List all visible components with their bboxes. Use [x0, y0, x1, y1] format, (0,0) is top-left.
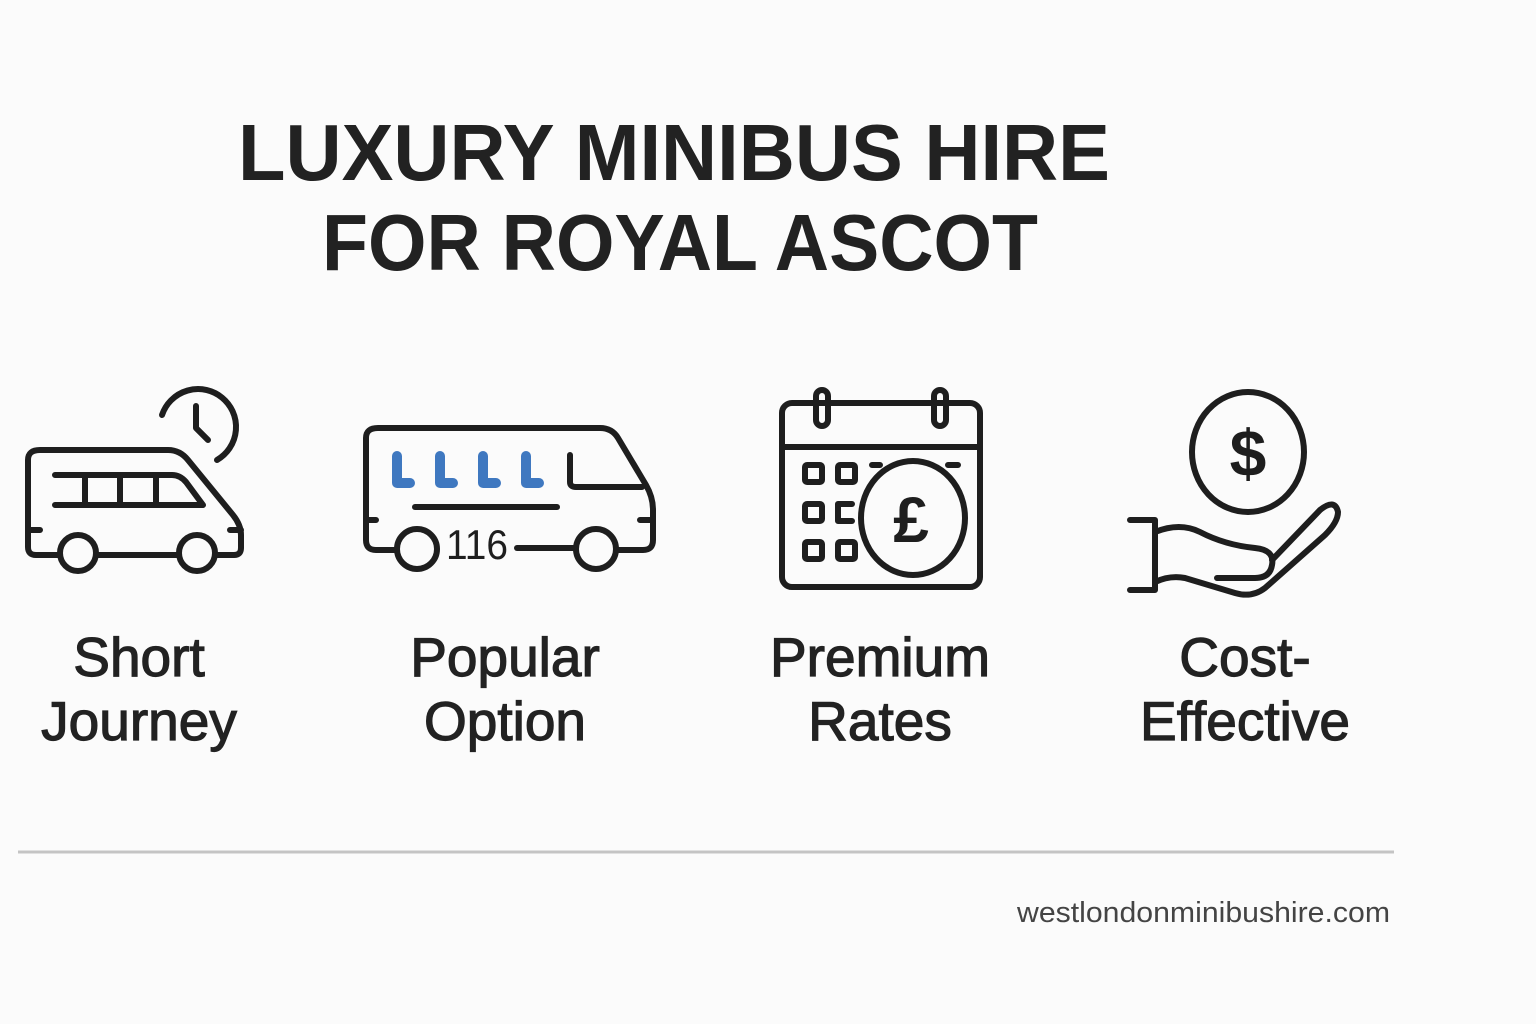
- label: cost-effective: Effective: [1140, 690, 1350, 752]
- title: LUXURY MINIBUS HIRE: [238, 108, 1110, 197]
- label: short journey: Short: [73, 626, 205, 688]
- icon: calendar with pound coin: [782, 390, 980, 587]
- label: premium rates: Rates: [808, 690, 952, 752]
- label: popular option: Popular: [410, 626, 600, 688]
- labels: [41, 626, 1350, 752]
- icon: minibus with seats: [366, 428, 653, 569]
- label: short journey: Journey: [41, 690, 237, 752]
- title: [238, 108, 1110, 287]
- title: FOR ROYAL ASCOT: [322, 198, 1038, 287]
- label: popular option: Option: [424, 690, 586, 752]
- icon: hand with dollar coin: [1130, 392, 1338, 595]
- label: premium rates: Premium: [770, 626, 990, 688]
- icon: minibus with clock: [28, 389, 241, 571]
- footer url: westlondonminibushire.com: [1016, 897, 1390, 929]
- label: cost-effective: Cost-: [1179, 626, 1311, 688]
- icon: minibus with seats: 116: [446, 521, 508, 568]
- icon: calendar with pound coin: £: [893, 484, 929, 556]
- icon: hand with dollar coin: $: [1230, 416, 1266, 490]
